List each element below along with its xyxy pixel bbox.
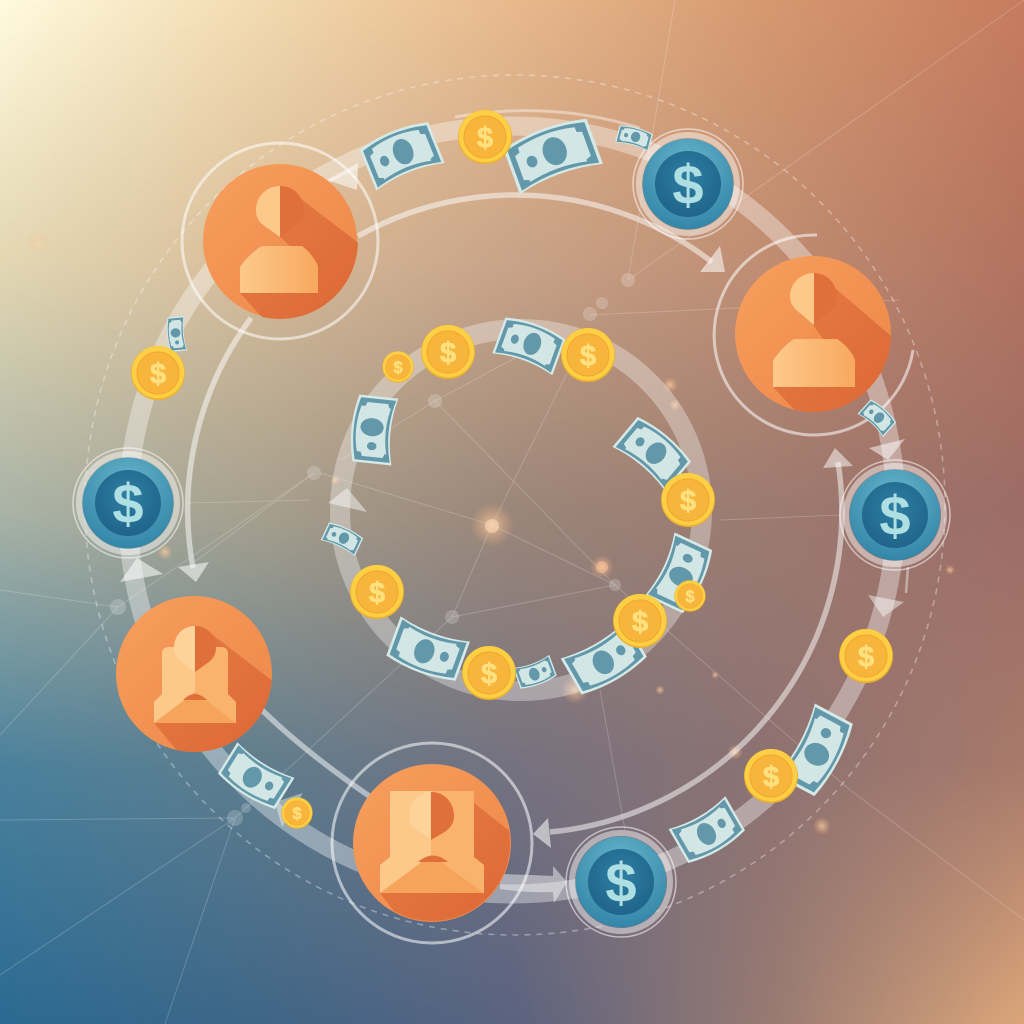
person ring: top left (182, 143, 378, 339)
coin: inner top left: $ (440, 338, 456, 370)
arrow: near small coin (275, 793, 303, 827)
arrow: left on top ring (327, 163, 358, 190)
banknote: right small (858, 398, 898, 437)
banknote: inner bottom left (385, 616, 470, 685)
banknote: left small (166, 316, 187, 352)
banknote: inner left small (321, 520, 364, 556)
coin: inner lower right small: $ (685, 587, 695, 606)
top thin arc (455, 111, 640, 128)
dollar node: bottom: $ (605, 851, 637, 914)
banknote: lower right tall (776, 703, 857, 798)
coin: inner left: $ (369, 578, 385, 610)
arrow: up at right (823, 448, 853, 468)
coin: inner top right: $ (580, 340, 596, 372)
arrow: down at right bottom (868, 595, 904, 617)
banknote: top small (615, 123, 653, 151)
coin: lower right: $ (763, 762, 779, 794)
coin: inner bottom (462, 646, 516, 700)
person node: top left (203, 164, 365, 326)
coin: top: $ (477, 122, 493, 154)
arrow: up on left ring (120, 558, 163, 582)
dollar node: right (840, 460, 950, 570)
dollar node: top: $ (672, 153, 704, 216)
coin: right: $ (858, 642, 874, 674)
coin: inner left (350, 565, 404, 619)
arrow: to bottom building (533, 818, 551, 848)
inner flow ring (340, 329, 702, 691)
building node: left (116, 596, 279, 759)
banknote: inner right top (612, 414, 694, 492)
banknote: lower left (216, 742, 294, 813)
coin: lower left small: $ (292, 804, 302, 823)
glow sparkles (26, 231, 955, 835)
arrow: up on inner ring (328, 488, 367, 512)
arrow: to top right person (700, 246, 725, 272)
coin: inner lower right small (674, 580, 706, 612)
dollar node: left (73, 448, 183, 558)
coin: inner top small: $ (393, 358, 403, 377)
banknote: lower right (669, 796, 747, 867)
coin: right (839, 629, 893, 683)
arrow: down at right top (869, 439, 905, 460)
banknote: inner right (645, 532, 716, 615)
coin: left: $ (150, 358, 166, 390)
banknote: inner bottom right (561, 621, 649, 699)
dollar node: bottom (566, 827, 676, 937)
coin: inner lower right (613, 594, 667, 648)
middle flow ring (188, 195, 842, 832)
banknote: top large (502, 114, 603, 194)
outer dashed orbit (85, 75, 945, 935)
coin: inner bottom: $ (481, 658, 497, 690)
coin: lower left small (281, 797, 313, 829)
coin: inner top small (382, 351, 414, 383)
person node: top right (735, 256, 898, 419)
person ring: top right (714, 235, 913, 435)
outer flow ring (128, 126, 896, 894)
network nodes (110, 273, 635, 826)
dollar node: top (633, 129, 743, 239)
dollar node: left: $ (112, 472, 144, 535)
coin: inner top right (561, 328, 615, 382)
person ring: bottom (332, 743, 532, 943)
building node: bottom (353, 764, 517, 928)
banknote: inner left tall (348, 394, 398, 466)
dollar node: right: $ (879, 484, 911, 547)
short thin trail (906, 567, 908, 593)
coin: inner lower right: $ (632, 606, 648, 638)
arrow: down to left building (178, 562, 209, 582)
coin: inner right: $ (680, 486, 696, 518)
coin: inner top left (421, 325, 475, 379)
coin: left (131, 346, 185, 400)
arrow: to bottom blue coin (500, 866, 567, 903)
coin: inner right (661, 473, 715, 527)
banknote: top left (358, 118, 445, 191)
banknote: inner top (492, 313, 567, 375)
banknote: inner bottom small (513, 655, 558, 691)
coin: lower right (744, 749, 798, 803)
coin: top (458, 110, 512, 164)
